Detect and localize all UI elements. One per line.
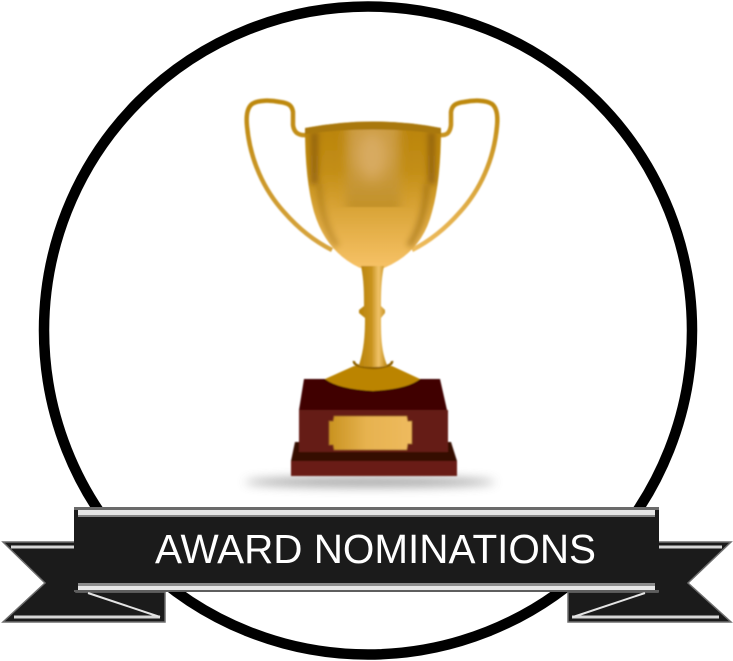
name plaque (329, 416, 412, 450)
right ribbon tail (568, 542, 731, 622)
lower plinth (291, 461, 457, 476)
ribbon title: AWARD NOMINATIONS (155, 526, 596, 572)
trophy shadow (245, 477, 495, 487)
trophy foot (325, 366, 420, 391)
left handle (247, 101, 332, 250)
ribbon banner (3, 507, 731, 622)
trophy base front (299, 410, 448, 452)
icon: gold trophy (245, 101, 497, 487)
stem (359, 266, 387, 365)
lower plinth shadow (291, 442, 457, 461)
cup bowl (300, 118, 446, 270)
ribbon main band (74, 507, 659, 592)
left ribbon tail (3, 542, 165, 622)
trophy base top (299, 379, 447, 410)
right handle (412, 101, 497, 250)
